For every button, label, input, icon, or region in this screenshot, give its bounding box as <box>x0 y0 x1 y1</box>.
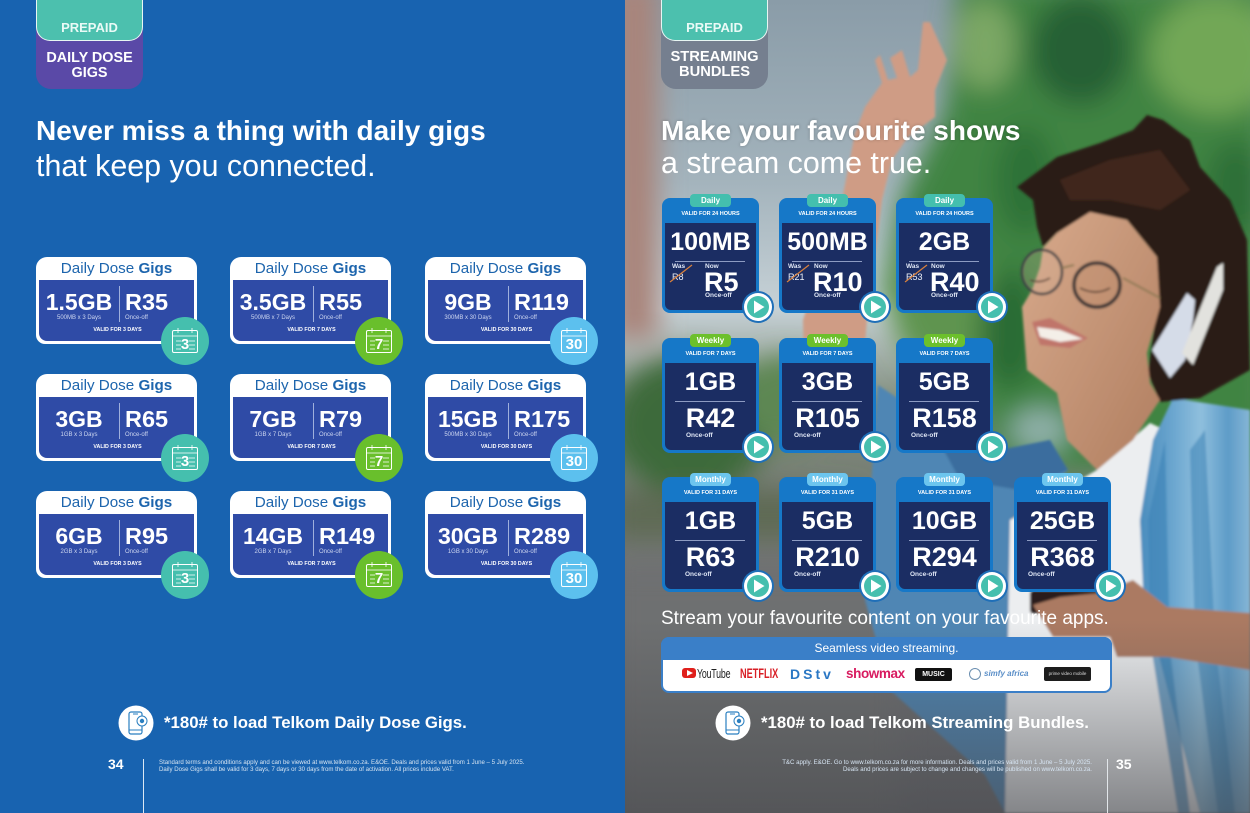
card: 3.5GB: Daily Dose Gigs <box>255 260 366 277</box>
bundle: daily 2GB: Once-off <box>931 292 958 299</box>
card: 3GB: R65 <box>125 406 168 432</box>
play button <box>976 431 1008 463</box>
photo background: woman with headphones <box>625 0 1250 813</box>
card: 7GB: R79 <box>319 406 362 432</box>
bundle: monthly 1GB: Monthly <box>695 475 726 484</box>
bundle: weekly 1GB <box>662 338 759 453</box>
bundle: monthly 5GB: Once-off <box>794 571 821 578</box>
logo: Simfy Africa: simfy africa <box>984 669 1028 678</box>
icon: calendar 3: 3 <box>181 570 189 587</box>
bundle: monthly 10GB: VALID FOR 31 DAYS <box>918 490 971 496</box>
panel: streaming apps <box>661 637 1112 693</box>
bundle: monthly 5GB: Monthly <box>812 475 843 484</box>
subheading: stream apps: Stream your favourite content on your favourite apps. <box>661 608 1109 629</box>
footnote: daily dose terms <box>159 758 524 773</box>
glasses <box>1022 250 1062 294</box>
card: 3.5GB: Once-off <box>319 315 342 321</box>
bundle: daily 500MB: VALID FOR 24 HOURS <box>798 211 857 217</box>
card: 9GB: 300MB x 30 Days <box>444 315 492 321</box>
logo: Apple Music: MUSIC <box>922 671 945 678</box>
bundle: monthly 10GB <box>896 477 993 592</box>
bundle: weekly 5GB <box>896 338 993 453</box>
footnote: daily dose terms: Standard terms and conditions apply and can be viewed at www.telkom.co.za. E&OE. Deals and prices valid from 1 June – 5 July 2025. <box>159 758 524 766</box>
bundle: daily 100MB: Daily <box>701 196 720 205</box>
icon: calendar 7 <box>355 551 403 599</box>
card: 15GB: 500MB x 30 Days <box>444 432 492 438</box>
icon: calendar 30 <box>550 551 598 599</box>
page number 35: 35 <box>1116 756 1132 772</box>
card: 14GB <box>230 491 391 578</box>
card: 15GB: R175 <box>514 406 570 432</box>
card: 9GB: R119 <box>514 289 569 315</box>
bundle: monthly 25GB: VALID FOR 31 DAYS <box>1036 490 1089 496</box>
card: 30GB: 30GB <box>438 523 498 549</box>
icon: calendar 30: 30 <box>566 453 582 470</box>
card: 14GB: Daily Dose Gigs <box>255 494 366 511</box>
holding hand <box>1033 580 1250 670</box>
hair <box>1017 115 1250 402</box>
heading: streaming: Make your favourite shows <box>661 115 1020 146</box>
icon: calendar 7: 7 <box>375 570 383 587</box>
bundle: daily 500MB: Once-off <box>814 292 841 299</box>
bundle: daily 100MB: VALID FOR 24 HOURS <box>681 211 740 217</box>
footnote: streaming terms: T&C apply. E&OE. Go to www.telkom.co.za for more information. Deals and prices valid from 1 June – 5 July 2025. <box>782 758 1092 766</box>
bundle: daily 500MB: R21 <box>788 272 805 282</box>
icon: calendar 3 <box>161 317 209 365</box>
card: 7GB: 1GB x 7 Days <box>254 432 292 438</box>
bundle: monthly 25GB: 25GB <box>1030 507 1095 535</box>
bundle: monthly 1GB: 1GB <box>685 507 736 535</box>
icon: phone dial <box>716 706 750 740</box>
card: 15GB: VALID FOR 30 DAYS <box>481 444 532 450</box>
card: 7GB: Once-off <box>319 432 342 438</box>
bundle: monthly 10GB: Once-off <box>910 571 937 578</box>
tab: streaming bundles <box>661 0 768 89</box>
card: 15GB <box>425 374 586 461</box>
prepaid label <box>36 0 143 41</box>
bundle: daily 2GB: VALID FOR 24 HOURS <box>915 211 974 217</box>
icon: calendar 7: 7 <box>375 453 383 470</box>
card: 3.5GB: VALID FOR 7 DAYS <box>287 327 336 333</box>
bundle: weekly 5GB: VALID FOR 7 DAYS <box>919 351 970 357</box>
bundle: weekly 3GB: R105 <box>795 403 860 433</box>
icon: phone dial <box>118 706 154 740</box>
bundle: daily 2GB <box>896 198 993 313</box>
card: 1.5GB: 1.5GB <box>46 289 112 315</box>
bundle: monthly 5GB <box>779 477 876 592</box>
icon: calendar 3 <box>161 434 209 482</box>
card: 1.5GB: Once-off <box>125 315 148 321</box>
card: 3GB: VALID FOR 3 DAYS <box>93 444 142 450</box>
footnote: streaming terms: Deals and prices are subject to change and changes will be published on www.telkom.co.za. <box>843 766 1092 773</box>
prepaid label: PREPAID <box>61 20 118 35</box>
card: 6GB: VALID FOR 3 DAYS <box>93 561 142 567</box>
card: 30GB: Once-off <box>514 549 537 555</box>
bundle: weekly 1GB: R42 <box>686 403 735 433</box>
bundle: daily 2GB: R40 <box>930 267 980 297</box>
icon: calendar 30: 30 <box>566 570 582 587</box>
card: 7GB: VALID FOR 7 DAYS <box>287 444 336 450</box>
panel header <box>661 637 1112 660</box>
play button <box>1094 570 1126 602</box>
card: 14GB: 2GB x 7 Days <box>254 549 292 555</box>
card: 14GB: VALID FOR 7 DAYS <box>287 561 336 567</box>
headphones <box>1152 293 1195 378</box>
logo: Apple Music <box>915 668 952 681</box>
bundle: monthly 5GB: VALID FOR 31 DAYS <box>801 490 854 496</box>
bundle: monthly 25GB <box>1014 477 1111 592</box>
card: 1.5GB <box>36 257 197 344</box>
bundle: weekly 3GB: Weekly <box>814 336 841 345</box>
card: 6GB <box>36 491 197 578</box>
left cardigan sleeve <box>865 385 1068 813</box>
tab title <box>670 49 759 80</box>
bundle: daily 500MB: 500MB <box>787 228 868 256</box>
heading: streaming: a stream come true. <box>661 146 931 180</box>
card: 30GB: VALID FOR 30 DAYS <box>481 561 532 567</box>
logo: Simfy Africa <box>969 668 1028 680</box>
card: 7GB <box>230 374 391 461</box>
card: 14GB: 14GB <box>243 523 303 549</box>
bundle: monthly 5GB: 5GB <box>802 507 853 535</box>
play button <box>976 570 1008 602</box>
play button <box>976 291 1008 323</box>
bundle: daily 100MB: Once-off <box>705 292 732 299</box>
card: 1.5GB: VALID FOR 3 DAYS <box>93 327 142 333</box>
bundle: monthly 25GB: Monthly <box>1047 475 1078 484</box>
heading: daily gigs <box>36 115 486 183</box>
card: 1.5GB: R35 <box>125 289 168 315</box>
bundle: daily 100MB: Now <box>705 263 719 270</box>
bundle: weekly 3GB: VALID FOR 7 DAYS <box>802 351 853 357</box>
logo: Prime Video <box>1044 667 1091 681</box>
card: 9GB: Once-off <box>514 315 537 321</box>
bundle: weekly 1GB: Weekly <box>697 336 724 345</box>
logo: Netflix: NETFLIX <box>740 666 778 681</box>
play button <box>859 570 891 602</box>
bundle: daily 500MB: R10 <box>813 267 863 297</box>
bundle: weekly 1GB: Once-off <box>686 432 713 439</box>
bundle: weekly 1GB: VALID FOR 7 DAYS <box>685 351 736 357</box>
bundle: weekly 5GB: Weekly <box>931 336 958 345</box>
card: 6GB: 6GB <box>55 523 103 549</box>
card: 3.5GB: 500MB x 7 Days <box>251 315 295 321</box>
phone <box>1030 590 1105 614</box>
bundle: weekly 5GB: R158 <box>912 403 977 433</box>
bundle: weekly 5GB: Once-off <box>911 432 938 439</box>
logo: DStv: DStv <box>790 666 834 682</box>
icon: calendar 30: 30 <box>566 336 582 353</box>
card: 3GB: Daily Dose Gigs <box>61 377 172 394</box>
footnote: daily dose terms: Daily Dose Gigs shall be valid for 3 days, 7 days or 30 days from the date of activation. All prices include VAT. <box>159 766 454 773</box>
card: 30GB: Daily Dose Gigs <box>450 494 561 511</box>
bundle: monthly 1GB: VALID FOR 31 DAYS <box>684 490 737 496</box>
logo: Showmax: showmax <box>846 666 905 681</box>
card: 15GB: 15GB <box>438 406 498 432</box>
bundle: daily 100MB: R5 <box>704 267 739 297</box>
card: 30GB: R289 <box>514 523 570 549</box>
bundle: weekly 3GB: 3GB <box>802 368 853 396</box>
bundle: daily 2GB: Daily <box>935 196 954 205</box>
logo: YouTube <box>682 666 730 681</box>
card: 1.5GB: 500MB x 3 Days <box>57 315 101 321</box>
bundle: monthly 10GB: 10GB <box>912 507 977 535</box>
tab title: BUNDLES <box>679 64 750 80</box>
card: 7GB: Daily Dose Gigs <box>255 377 366 394</box>
bundle: monthly 1GB: Once-off <box>685 571 712 578</box>
icon: calendar 30 <box>550 317 598 365</box>
bundle: daily 2GB: Was <box>906 263 919 270</box>
bundle: daily 500MB: Daily <box>818 196 837 205</box>
card: 6GB: Daily Dose Gigs <box>61 494 172 511</box>
card: 6GB: Once-off <box>125 549 148 555</box>
white shirt <box>1005 423 1200 813</box>
card: 3.5GB: R55 <box>319 289 362 315</box>
heading: streaming <box>661 115 1020 180</box>
bundle: daily 2GB: Now <box>931 263 945 270</box>
bundle: weekly 5GB: 5GB <box>919 368 970 396</box>
icon: calendar 7: 7 <box>375 336 383 353</box>
bundle: weekly 3GB <box>779 338 876 453</box>
tab title: DAILY DOSE <box>46 50 133 66</box>
bundle: monthly 25GB: R368 <box>1030 542 1095 572</box>
icon: calendar 30 <box>550 434 598 482</box>
card: 14GB: R149 <box>319 523 375 549</box>
bundle: daily 500MB <box>779 198 876 313</box>
play button <box>742 431 774 463</box>
card: 3.5GB: 3.5GB <box>240 289 306 315</box>
bundle: daily 500MB: Now <box>814 263 828 270</box>
load instruction: daily dose: *180# to load Telkom Daily Dose Gigs. <box>164 713 467 732</box>
card: 9GB: Daily Dose Gigs <box>450 260 561 277</box>
bundle: monthly 10GB: R294 <box>912 542 977 572</box>
tab title: GIGS <box>72 65 107 81</box>
icon: calendar 3 <box>161 551 209 599</box>
page number 34: 34 <box>108 756 124 772</box>
right cardigan <box>1140 398 1250 813</box>
bundle: daily 500MB: Was <box>788 263 801 270</box>
card: 3GB: Once-off <box>125 432 148 438</box>
bundle: daily 100MB: Was <box>672 263 685 270</box>
card: 3.5GB <box>230 257 391 344</box>
card: 3GB: 1GB x 3 Days <box>60 432 98 438</box>
card: 30GB <box>425 491 586 578</box>
bundle: monthly 1GB: R63 <box>686 542 735 572</box>
card: 6GB: R95 <box>125 523 168 549</box>
tab title: STREAMING <box>670 49 759 65</box>
card: 3GB: 3GB <box>55 406 103 432</box>
mouth <box>1032 318 1088 348</box>
bundle: weekly 3GB: Once-off <box>794 432 821 439</box>
prepaid label: PREPAID <box>686 20 743 35</box>
card: 7GB: 7GB <box>249 406 297 432</box>
icon: calendar 3: 3 <box>181 453 189 470</box>
card: 15GB: Once-off <box>514 432 537 438</box>
prepaid label <box>661 0 768 41</box>
play button <box>742 291 774 323</box>
bundle: daily 2GB: R53 <box>906 272 923 282</box>
bundle: daily 2GB: 2GB <box>919 228 970 256</box>
tab title <box>46 50 133 81</box>
play button <box>859 291 891 323</box>
bundle: weekly 1GB: 1GB <box>685 368 736 396</box>
arm and hand <box>803 22 947 400</box>
card: 30GB: 1GB x 30 Days <box>448 549 488 555</box>
footnote: streaming terms <box>782 758 1092 773</box>
heading: daily gigs: Never miss a thing with daily gigs <box>36 115 486 146</box>
logo: Prime Video: prime video mobile <box>1049 671 1086 676</box>
face and neck <box>1022 212 1160 470</box>
tab: daily dose gigs <box>36 0 143 89</box>
card: 3GB <box>36 374 197 461</box>
bundle: daily 100MB: 100MB <box>670 228 751 256</box>
bundle: daily 100MB <box>662 198 759 313</box>
card: 6GB: 2GB x 3 Days <box>60 549 98 555</box>
play button <box>859 431 891 463</box>
panel header: Seamless video streaming. <box>814 641 959 655</box>
logo: YouTube: YouTube <box>697 666 730 681</box>
load instruction: streaming: *180# to load Telkom Streaming Bundles. <box>761 713 1089 732</box>
bundle: monthly 1GB <box>662 477 759 592</box>
card: 9GB: VALID FOR 30 DAYS <box>481 327 532 333</box>
card: 14GB: Once-off <box>319 549 342 555</box>
card: 9GB <box>425 257 586 344</box>
card: 1.5GB: Daily Dose Gigs <box>61 260 172 277</box>
bundle: daily 100MB: R8 <box>672 272 684 282</box>
bundle: monthly 25GB: Once-off <box>1028 571 1055 578</box>
bundle: monthly 10GB: Monthly <box>929 475 960 484</box>
icon: calendar 3: 3 <box>181 336 189 353</box>
card: 9GB: 9GB <box>444 289 492 315</box>
card: 15GB: Daily Dose Gigs <box>450 377 561 394</box>
heading: daily gigs: that keep you connected. <box>36 149 376 183</box>
bundle: monthly 5GB: R210 <box>795 542 860 572</box>
play button <box>742 570 774 602</box>
icon: calendar 7 <box>355 317 403 365</box>
icon: calendar 7 <box>355 434 403 482</box>
